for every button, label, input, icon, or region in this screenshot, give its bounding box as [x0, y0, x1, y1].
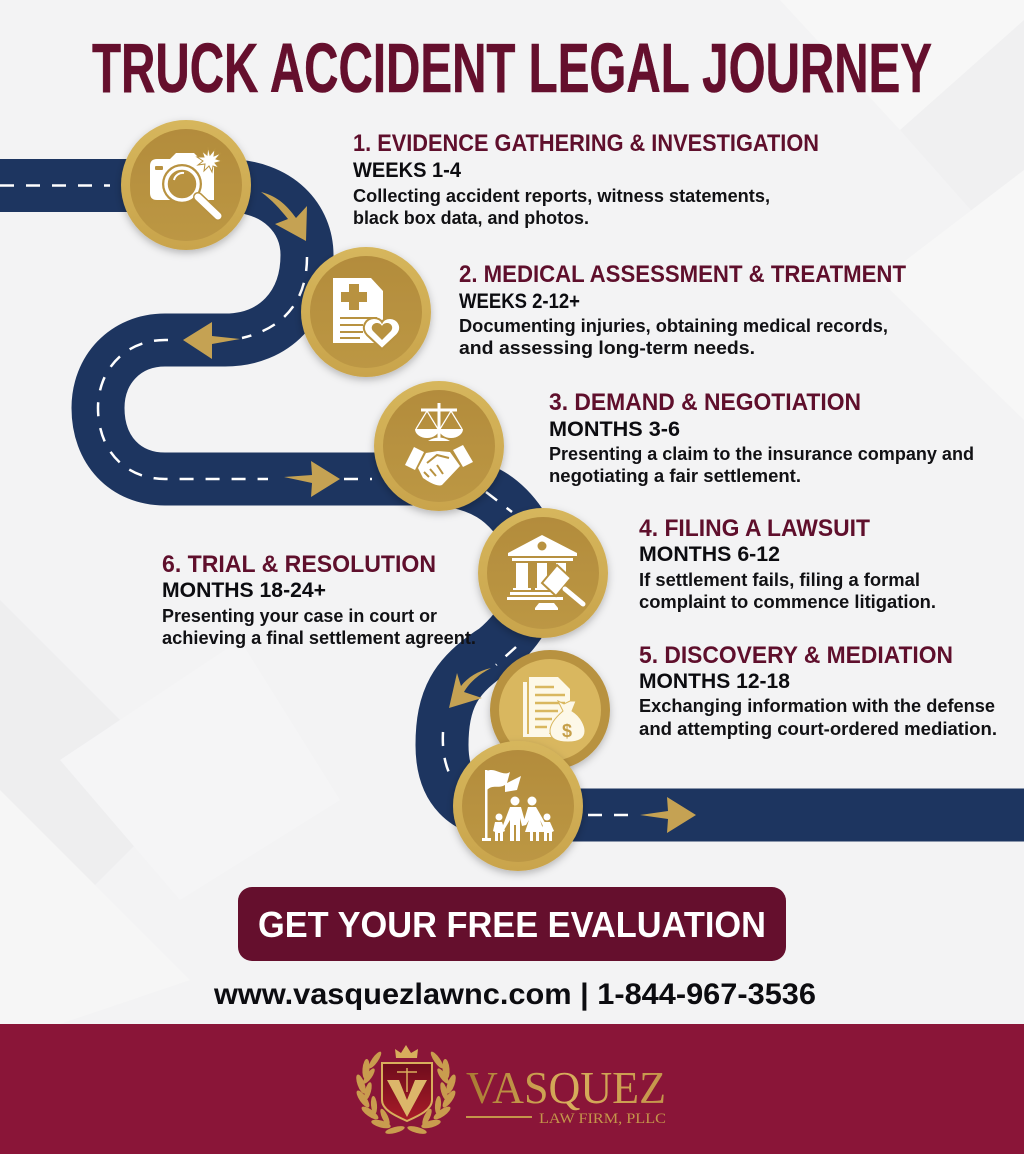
- footer band: [0, 1024, 1024, 1154]
- step 1 text: WEEKS 1-4: [353, 159, 461, 182]
- step 2 medallion: [301, 247, 431, 377]
- icon: documents and money bag: [523, 677, 585, 742]
- step 4 text: 4. FILING A LAWSUIT: [639, 515, 870, 542]
- step 1 medallion: [121, 120, 251, 250]
- step 4 text: MONTHS 6-12: [639, 543, 780, 566]
- step 2 text: [459, 261, 906, 358]
- step 3 text: 3. DEMAND & NEGOTIATION: [549, 389, 861, 416]
- step 3 text: negotiating a fair settlement.: [549, 466, 801, 486]
- step 4 text: If settlement fails, filing a formal: [639, 570, 920, 590]
- logo wordmark: VASQUEZ: [466, 1062, 666, 1113]
- step 4 text: complaint to commence litigation.: [639, 592, 936, 612]
- step 2 text: Documenting injuries, obtaining medical records,: [459, 316, 888, 336]
- step 2 text: 2. MEDICAL ASSESSMENT & TREATMENT: [459, 261, 906, 288]
- step 6 text: Presenting your case in court or: [162, 606, 437, 626]
- arrow: road direction 2: [183, 322, 240, 359]
- step 4 medallion: [478, 508, 608, 638]
- step 5 text: [639, 642, 997, 739]
- call-to-action button: [238, 887, 786, 961]
- icon: medical record with heart: [333, 278, 400, 349]
- step 3 text: [549, 389, 974, 486]
- call-to-action button: GET YOUR FREE EVALUATION: [258, 904, 766, 945]
- step 2 text: WEEKS 2-12+: [459, 290, 580, 313]
- step 4 text: [639, 515, 936, 612]
- step 1 text: [353, 130, 819, 228]
- step 5 medallion: [490, 650, 610, 770]
- step 3 text: MONTHS 3-6: [549, 418, 680, 441]
- step 6 text: MONTHS 18-24+: [162, 579, 326, 602]
- winding road: [0, 186, 1024, 815]
- arrow: road direction 4: [449, 668, 491, 708]
- step 5 text: 5. DISCOVERY & MEDIATION: [639, 642, 953, 669]
- arrow: road direction 1: [261, 192, 307, 241]
- arrow: road direction 5: [640, 797, 696, 833]
- step 6 text: [162, 551, 476, 648]
- icon: scales and handshake: [405, 403, 473, 485]
- arrow: road direction 3: [284, 461, 340, 497]
- logo subtitle: LAW FIRM, PLLC: [539, 1111, 666, 1127]
- logo crest: [354, 1045, 458, 1135]
- step 5 text: and attempting court-ordered mediation.: [639, 719, 997, 739]
- step 2 text: and assessing long-term needs.: [459, 338, 755, 358]
- icon: camera with magnifier: [150, 147, 222, 216]
- step 5 text: MONTHS 12-18: [639, 670, 790, 693]
- icon: flag and family: [482, 770, 554, 841]
- logo: [354, 1045, 666, 1135]
- step 6 text: 6. TRIAL & RESOLUTION: [162, 551, 436, 578]
- contact line: www.vasquezlawnc.com | 1-844-967-3536: [213, 978, 816, 1011]
- step 6 text: achieving a final settlement agreent.: [162, 628, 476, 648]
- step 5 text: Exchanging information with the defense: [639, 696, 995, 716]
- step 1 text: Collecting accident reports, witness statements,: [353, 186, 770, 206]
- step 1 text: black box data, and photos.: [353, 208, 589, 228]
- step 3 medallion: [374, 381, 504, 511]
- step 1 text: 1. EVIDENCE GATHERING & INVESTIGATION: [353, 130, 819, 157]
- icon: courthouse and gavel: [507, 535, 583, 610]
- step 6 medallion: [453, 741, 583, 871]
- step 5 medallion: $: [562, 721, 572, 741]
- step 3 text: Presenting a claim to the insurance company and: [549, 444, 974, 464]
